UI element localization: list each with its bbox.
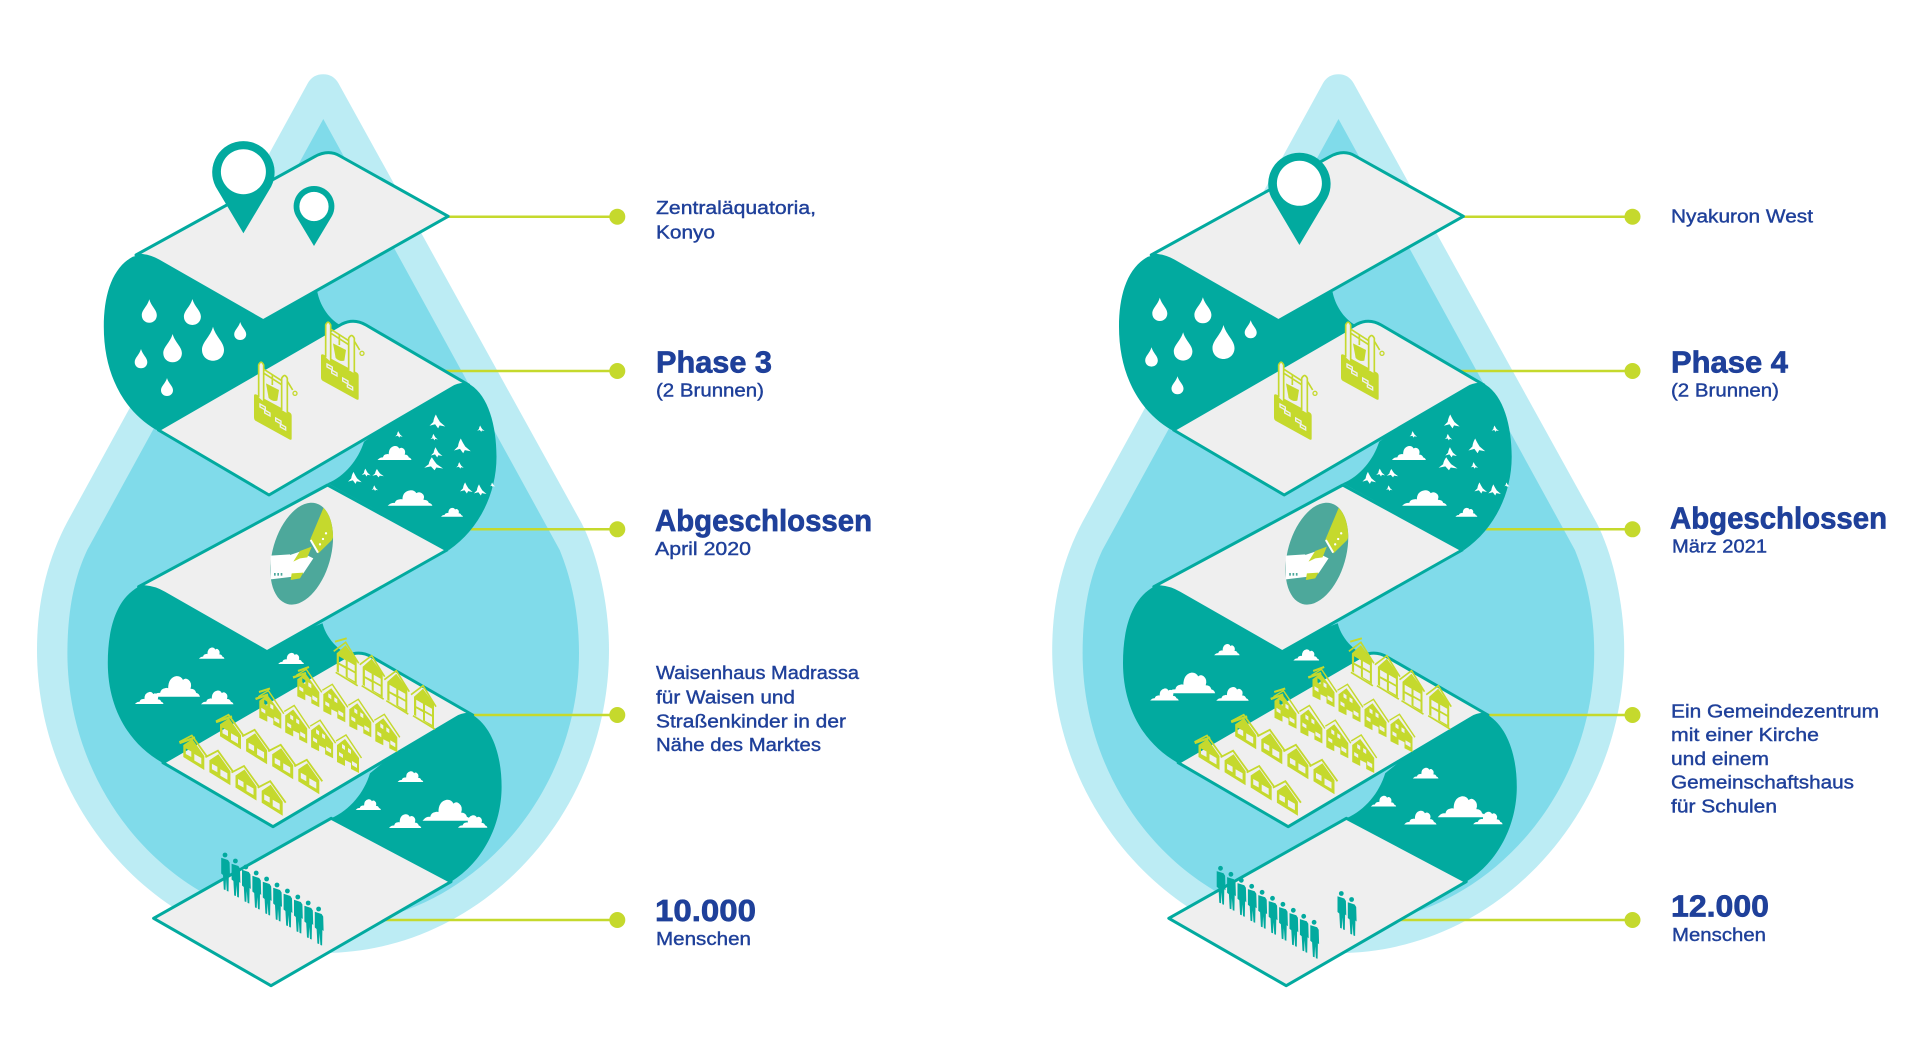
text: location: Konyo [656, 221, 715, 242]
text: phase: Phase 4 [1671, 344, 1789, 380]
text: location [656, 197, 816, 242]
text: description: für Schulen [1671, 796, 1777, 817]
icon: location pin [1268, 153, 1331, 245]
icon: handshake [259, 495, 344, 612]
text: description: Waisenhaus Madrassa [656, 662, 860, 683]
text: phase: Phase 3 [656, 344, 772, 380]
icon: small location pin [294, 186, 334, 246]
plate 3 [1154, 485, 1462, 652]
icon: wells [254, 322, 364, 440]
clouds: ribbon 3 [1150, 644, 1319, 701]
text: completed: April 2020 [655, 538, 751, 559]
water drop: outer [37, 74, 609, 953]
text: people count: Menschen [1672, 924, 1766, 945]
icon: wells [1274, 322, 1384, 440]
plate 5 [154, 818, 451, 986]
text: location: Zentraläquatoria, [656, 197, 816, 218]
text: completed [655, 503, 872, 559]
plate 4 [1178, 653, 1488, 827]
plate 4 [163, 653, 473, 827]
leader dots [1624, 209, 1640, 928]
ribbon 3 [1123, 580, 1363, 763]
ribbon 1 [104, 250, 340, 430]
leader dots [609, 209, 625, 928]
leader lines [380, 217, 617, 920]
text: location: Nyakuron West [1671, 206, 1813, 227]
text: phase: (2 Brunnen) [1671, 380, 1779, 401]
text: description: und einem [1671, 748, 1769, 769]
text: phase: (2 Brunnen) [656, 380, 764, 401]
plate 2 [158, 321, 469, 495]
text: description [1671, 700, 1879, 817]
text: description: Straßenkinder in der [656, 710, 846, 731]
text: people count: 10.000 [655, 893, 756, 928]
clouds: ribbon 4 [356, 771, 487, 828]
text: completed: März 2021 [1672, 536, 1767, 557]
clouds: ribbon 4 [1371, 768, 1503, 824]
icon: birds and clouds [1362, 414, 1510, 517]
text: description [656, 662, 860, 755]
text: description: Nähe des Marktes [656, 734, 821, 755]
ribbon 4 [1346, 712, 1517, 882]
icon: people [1217, 866, 1357, 959]
text: people count: Menschen [656, 928, 751, 949]
text: completed: Abgeschlossen [1670, 500, 1887, 536]
plate 1 [1151, 153, 1463, 321]
text: description: Ein Gemeindezentrum [1671, 700, 1879, 721]
text: description: mit einer Kirche [1671, 724, 1819, 745]
plate 2 [1174, 321, 1484, 495]
text: people count [1671, 889, 1769, 945]
icon: large location pin [212, 141, 275, 233]
icon: birds and clouds [348, 414, 495, 517]
water drop: inner [1083, 119, 1594, 925]
infographic: Phase 4 [1052, 74, 1887, 986]
icon: houses [1194, 638, 1451, 816]
text: completed [1670, 500, 1887, 557]
ribbon 3 [108, 580, 348, 763]
ribbon 2 [328, 385, 496, 550]
plate 3 [139, 485, 447, 652]
text: description: für Waisen und [656, 686, 795, 707]
icon: people [221, 853, 324, 946]
plate 1 [136, 153, 448, 321]
plate 5 [1169, 818, 1466, 986]
icon: water drops [1145, 297, 1257, 394]
text: phase [1671, 344, 1789, 401]
water drop: outer [1052, 74, 1624, 953]
text: completed: Abgeschlossen [655, 503, 872, 538]
leader lines [1395, 217, 1632, 920]
icon: water drops [135, 299, 246, 396]
ribbon 4 [331, 712, 502, 882]
text: people count [655, 893, 756, 949]
icon: houses [179, 638, 436, 816]
icon: handshake [1275, 495, 1359, 612]
infographic: Phase 3 [37, 74, 872, 986]
ribbon 2 [1343, 385, 1512, 550]
text: description: Gemeinschaftshaus [1671, 772, 1854, 793]
clouds: ribbon 3 [135, 648, 304, 704]
text: phase [656, 344, 772, 401]
water drop: inner [67, 119, 579, 925]
text: people count: 12.000 [1671, 889, 1769, 924]
ribbon 1 [1119, 250, 1355, 430]
